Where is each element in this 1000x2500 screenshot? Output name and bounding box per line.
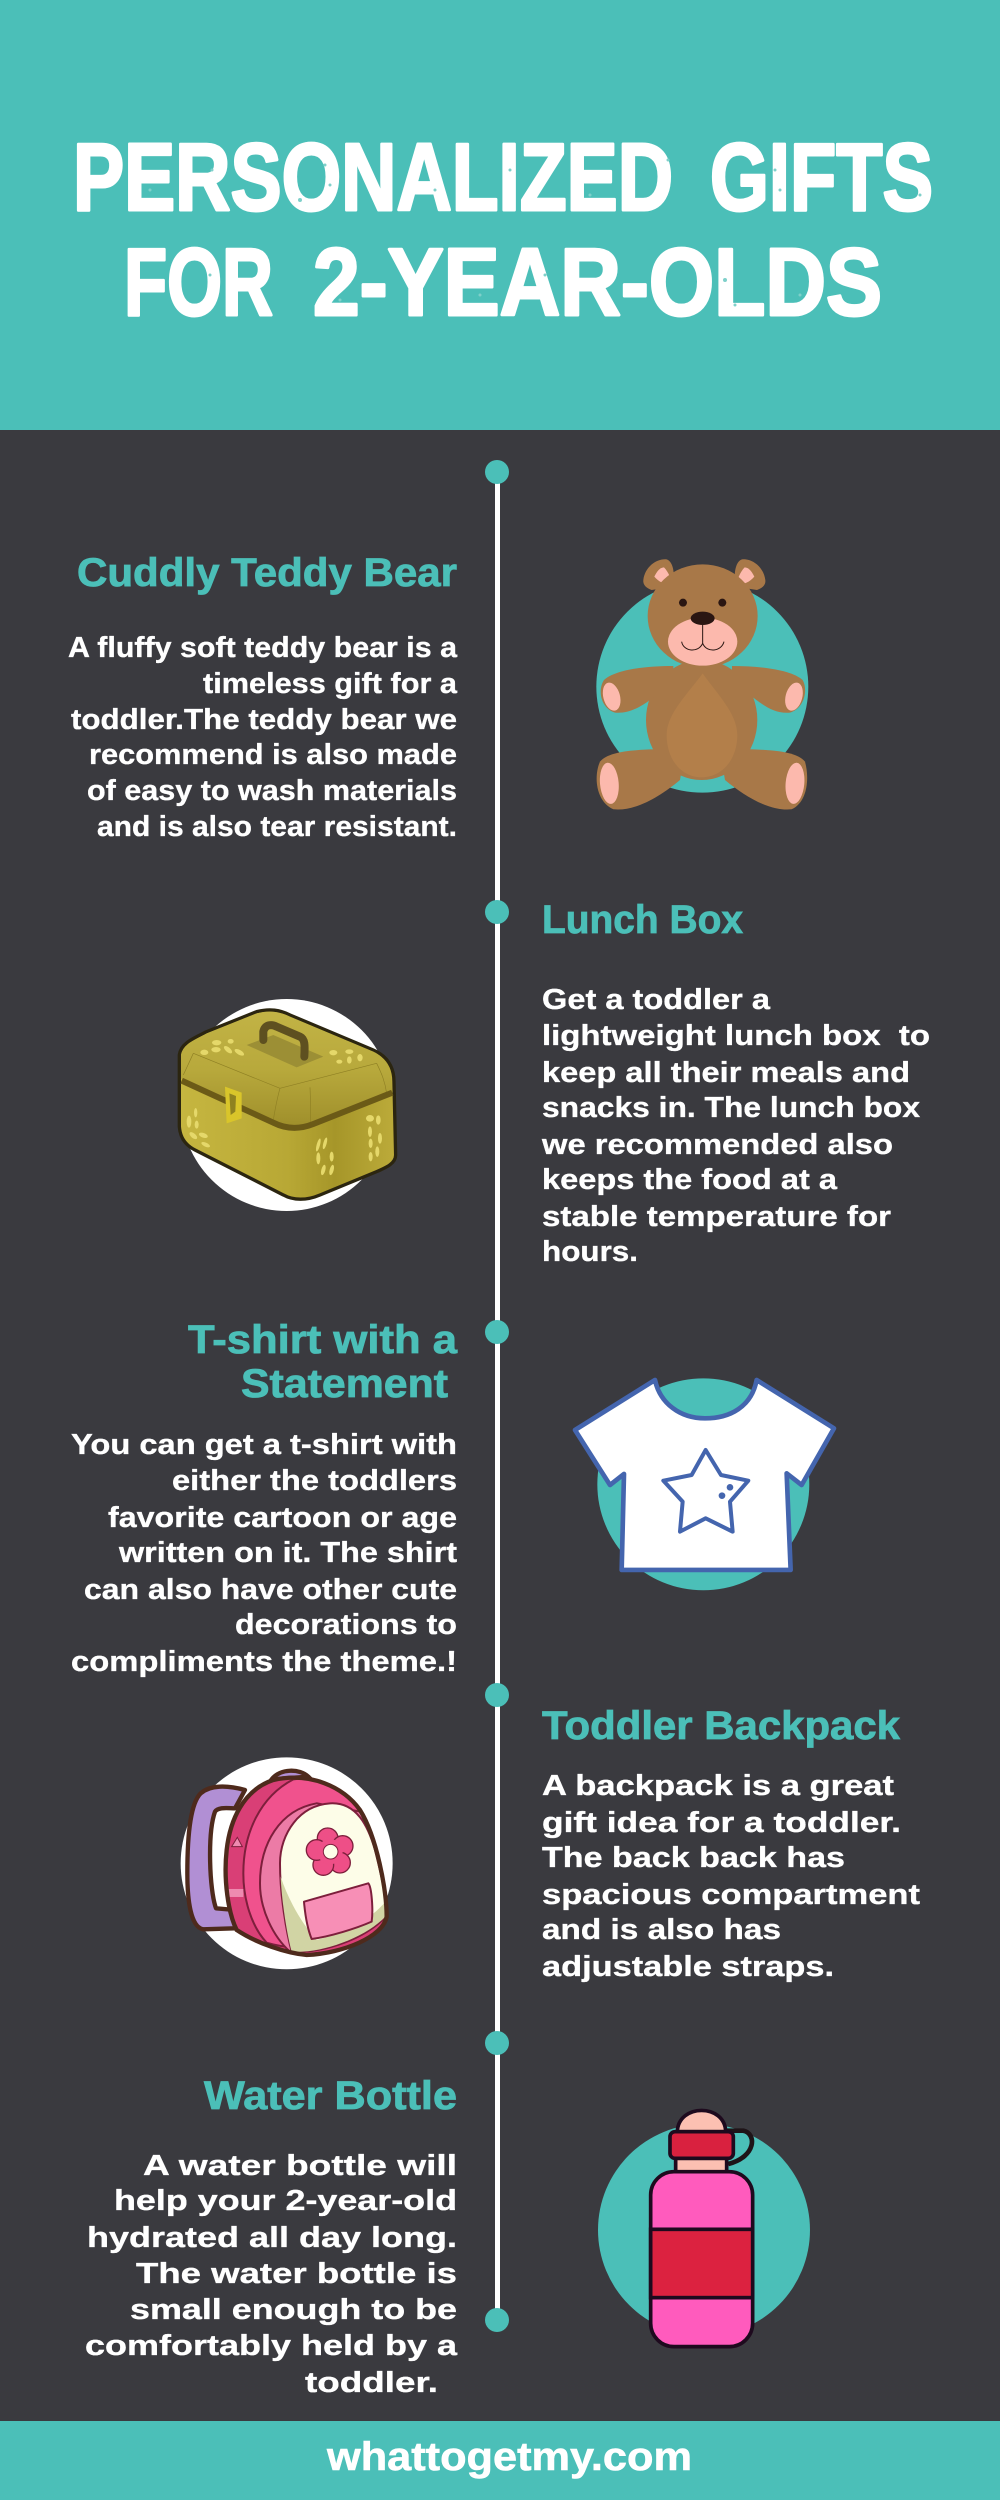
text block: backpack description: A backpack is a great [542, 1770, 894, 1802]
text block: water bottle description: The water bottle is [136, 2258, 457, 2290]
title: FOR [124, 229, 273, 336]
heading: water bottle: Water Bottle [204, 2074, 457, 2118]
text block: teddy bear description [68, 632, 458, 843]
footer band [0, 2421, 1000, 2500]
text block: t-shirt description: can also have other cute [84, 1574, 457, 1606]
footer website text: whattogetmy.com [326, 2435, 692, 2479]
text block: water bottle description [85, 2150, 458, 2399]
title [73, 124, 933, 336]
icon: backpack [181, 1757, 393, 1969]
text block: t-shirt description: written on it. The shirt [118, 1537, 457, 1569]
text block: lunch box description: hours. [542, 1236, 638, 1268]
text block: water bottle description: help your 2-year-old [114, 2185, 457, 2217]
icon: teddy bear [596, 559, 808, 810]
text block: backpack description: gift idea for a toddler. [542, 1807, 901, 1839]
heading: cuddly teddy bear: Cuddly Teddy Bear [77, 551, 457, 595]
text block: water bottle description: small enough to be [130, 2294, 457, 2326]
text block: lunch box description: keep all their meals and [542, 1057, 910, 1089]
icon: lunch box [179, 999, 396, 1211]
icon: water bottle [598, 2110, 810, 2347]
dark background panel [0, 430, 1000, 2421]
text block: lunch box description [541, 984, 930, 1268]
text block: lunch box description: stable temperature for [542, 1201, 891, 1233]
text block: t-shirt description: decorations to [235, 1609, 457, 1641]
title: PERSONALIZED [73, 124, 673, 231]
text block: teddy bear description: A fluffy soft teddy bear is a [68, 632, 458, 664]
text block: teddy bear description: of easy to wash materials [87, 775, 457, 807]
text block: teddy bear description: toddler.The teddy bear we [71, 704, 457, 736]
text block: lunch box description: snacks in. The lunch box [542, 1092, 920, 1124]
text block: t-shirt description: compliments the theme.! [71, 1646, 457, 1678]
heading: toddler backpack: Toddler Backpack [542, 1704, 901, 1748]
text block: teddy bear description: and is also tear resistant. [97, 811, 457, 843]
text block: t-shirt description: either the toddlers [172, 1465, 457, 1497]
text block: t-shirt description [71, 1429, 457, 1678]
text block: lunch box description: keeps the food at a [542, 1164, 838, 1196]
icon: t-shirt [575, 1378, 834, 1590]
panel: t-shirt [71, 1318, 834, 1678]
heading: t-shirt with a statement: T-shirt with a [188, 1318, 458, 1362]
text block: t-shirt description: You can get a t-shirt with [71, 1429, 457, 1461]
text block: t-shirt description: favorite cartoon or age [108, 1502, 457, 1534]
timeline [485, 460, 509, 2332]
panel: toddler backpack [181, 1704, 920, 1983]
text block: lunch box description: lightweight lunch box to [542, 1020, 930, 1052]
text block: backpack description: adjustable straps. [542, 1951, 834, 1983]
text block: water bottle description: toddler. [305, 2367, 438, 2399]
text block: backpack description [542, 1770, 920, 1983]
text block: lunch box description: we recommended also [541, 1129, 893, 1161]
title: 2-YEAR-OLDS [313, 229, 882, 336]
panel: water bottle [85, 2074, 810, 2399]
text block: teddy bear description: recommend is also made [89, 739, 457, 771]
heading: t-shirt with a statement: Statement [241, 1362, 448, 1406]
text block: water bottle description: A water bottle will [143, 2150, 457, 2182]
text block: water bottle description: comfortably held by a [85, 2330, 458, 2362]
header band [0, 0, 1000, 430]
text block: water bottle description: hydrated all day long. [87, 2222, 457, 2254]
heading: t-shirt with a statement [188, 1318, 458, 1406]
panel: cuddly teddy bear [68, 551, 808, 843]
heading: lunch box: Lunch Box [542, 898, 743, 942]
text block: backpack description: and is also has [542, 1914, 781, 1946]
text block: backpack description: spacious compartment [542, 1879, 920, 1911]
text block: lunch box description: Get a toddler a [542, 984, 771, 1016]
panel: lunch box [179, 898, 930, 1268]
text block: backpack description: The back back has [542, 1842, 845, 1874]
title: GIFTS [710, 124, 933, 231]
text block: teddy bear description: timeless gift for a [203, 668, 458, 700]
